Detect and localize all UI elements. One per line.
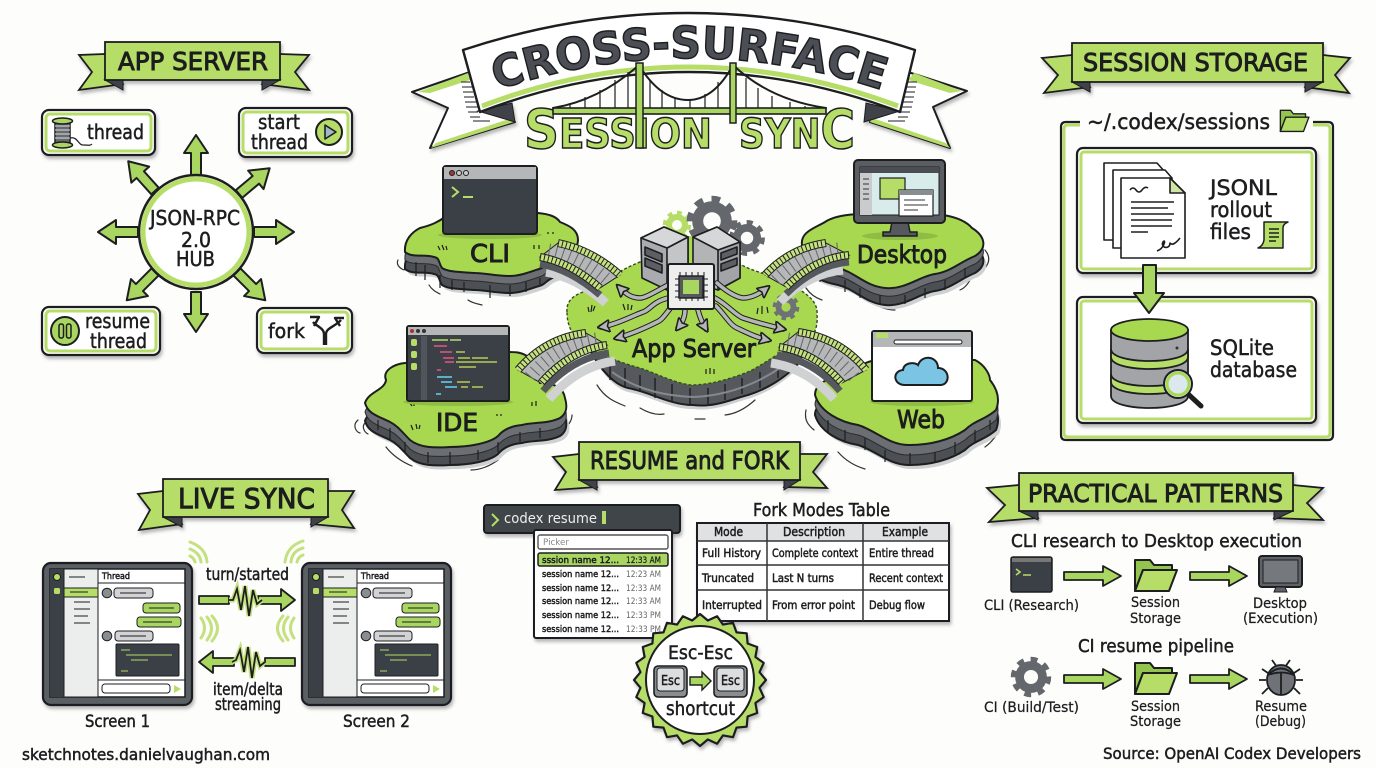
label: session storage: Storage: [1130, 714, 1181, 730]
label: session storage: [1130, 595, 1181, 627]
arrow: CI to storage: [1064, 669, 1121, 689]
icon: folder: [1280, 110, 1309, 131]
label: item/delta streaming: item/delta: [213, 680, 283, 700]
island: Desktop: [802, 160, 986, 309]
CLI rock: [405, 221, 581, 298]
icon: desktop: [1259, 556, 1302, 592]
table: fork modes: Mode: [714, 525, 743, 539]
session sync subtitle: [524, 98, 855, 161]
title text: CROSS-SURFACE: [492, 24, 889, 90]
heading banner: session storage: SESSION STORAGE: [1083, 48, 1308, 77]
label: CLI research: CLI (Research): [984, 598, 1079, 614]
title ribbon main: [463, 13, 915, 112]
label: desktop execution: [1243, 596, 1318, 627]
ground marks: [355, 250, 1000, 470]
panel: live sync: [43, 479, 451, 732]
icon: magnifier: [1164, 370, 1201, 406]
IDE window: [403, 326, 513, 406]
arrow: key to key: [690, 672, 711, 690]
Desktop rock: [802, 221, 986, 309]
bridges between islands: [518, 243, 866, 399]
badge: Esc-Esc shortcut: Esc-Esc: [668, 642, 733, 664]
island: Web: [815, 331, 1001, 469]
session picker: 12:33 PM: [626, 625, 661, 635]
terminal bar: codex resume: codex resume: [504, 511, 597, 527]
session picker: Picker: [543, 538, 570, 548]
central islands diagram: [355, 160, 1001, 470]
heading: fork modes table: Fork Modes Table: [753, 500, 890, 521]
table: fork modes: Truncated: [701, 571, 754, 585]
card: JSONL rollout files: JSONL: [1208, 176, 1277, 200]
card: start thread: thread: [251, 130, 308, 154]
table: fork modes: Last N turns: [772, 571, 834, 585]
card: JSONL rollout files: rollout: [1210, 198, 1272, 222]
session picker: 12:33 AM: [626, 597, 661, 607]
card: resume thread: resume: [85, 309, 150, 333]
CLI grass: [405, 213, 578, 276]
Web grass: [815, 360, 998, 445]
icon: thread spool: [52, 118, 92, 148]
label: desktop execution: Desktop: [1253, 596, 1307, 612]
icon: folder: [1135, 560, 1177, 591]
table: fork modes: Entire thread: [869, 546, 934, 560]
outer frame: ~/.codex/sessions: ~/.codex/sessions: [1087, 110, 1270, 134]
card: thread: thread: [87, 120, 144, 144]
arrow: files to database: [1134, 265, 1164, 313]
panel: session storage: [1042, 43, 1350, 440]
island: CLI: [405, 166, 581, 298]
outer frame: ~/.codex/sessions: [1061, 110, 1333, 440]
IDE grass: [365, 352, 566, 447]
IDE grass tufts: [410, 382, 536, 430]
pattern heading 2: CI resume pipeline: [1078, 636, 1234, 657]
badge inner disc: [646, 626, 754, 734]
title ribbon tails: [412, 72, 967, 148]
signal arcs: [190, 541, 303, 641]
card: fork: [257, 308, 352, 353]
Desktop monitor: [854, 160, 945, 240]
JSON-RPC hub: JSON-RPC: [148, 206, 240, 230]
island: App Server: App Server: [632, 334, 757, 363]
label: desktop execution: (Execution): [1243, 611, 1318, 627]
screen 1: Thread: [101, 572, 130, 582]
arrow: turn/started signal: [199, 586, 295, 616]
icon: bug: [1259, 660, 1303, 695]
screen 2: Thread: [360, 572, 389, 582]
icon: documents: [1104, 163, 1185, 258]
arrow: item/delta signal: [199, 647, 295, 678]
session picker: session name 12...: [542, 597, 619, 607]
label: session storage: Storage: [1130, 611, 1181, 627]
panel: app server: [42, 42, 352, 355]
card: JSONL rollout files: [1077, 148, 1316, 273]
label: item/delta streaming: [213, 680, 283, 715]
icon: cloud: [895, 358, 948, 385]
JSON-RPC hub: HUB: [176, 247, 215, 271]
gears: [665, 200, 797, 318]
Web rock: [815, 370, 1001, 469]
icon: folder: [1135, 663, 1177, 694]
card: SQLite database: database: [1210, 358, 1297, 382]
bridge: Web to App Server: [771, 332, 866, 399]
icon: play: [316, 119, 342, 145]
JSON-RPC hub: 2.0: [181, 228, 211, 252]
icon: CLI terminal: [1011, 557, 1052, 592]
panel: practical patterns: [984, 473, 1323, 730]
Desktop grass: [802, 213, 983, 288]
badge: Esc-Esc shortcut: shortcut: [666, 698, 735, 720]
island: Desktop: Desktop: [857, 240, 947, 269]
footer: source: Source: OpenAI Codex Developers: [1103, 744, 1361, 763]
table: fork modes: Example: [882, 525, 928, 539]
label: session storage: Session: [1131, 699, 1180, 715]
App Server grass tufts: [588, 304, 768, 374]
icon: fork arrows: [310, 317, 344, 345]
table: fork modes: Debug flow: [869, 598, 925, 612]
session picker: session name 12...: [542, 611, 619, 621]
server tower right: [693, 227, 740, 290]
panel: resume and fork: [484, 442, 949, 746]
island: IDE: [365, 326, 569, 469]
hidden arc for title baseline: [497, 58, 882, 90]
label: screen 1: Screen 1: [85, 712, 150, 732]
session picker: session name 12...: [542, 625, 619, 635]
label: session storage: [1130, 699, 1181, 730]
label: CI build/test: CI (Build/Test): [984, 700, 1079, 716]
JSON-RPC hub: [139, 175, 253, 289]
heading banner: live sync: LIVE SYNC: [178, 482, 315, 515]
screen 1: [43, 563, 192, 705]
footer: site credit: sketchnotes.danielvaughan.com: [22, 745, 270, 764]
card: start thread: [239, 108, 352, 157]
table: fork modes: Interrupted: [702, 598, 762, 612]
label: screen 2: Screen 2: [343, 712, 410, 732]
island: App Server: [567, 200, 817, 410]
green gap between towers: [688, 236, 694, 266]
label: resume debug: (Debug): [1255, 714, 1306, 730]
icon: scroll: [1258, 222, 1288, 248]
pattern heading 1: CLI research to Desktop execution: [1011, 531, 1302, 552]
card: SQLite database: SQLite: [1210, 336, 1274, 360]
island: Web: Web: [897, 405, 945, 434]
badge scalloped edge: [634, 614, 766, 746]
session sync subtitle: SESSION: [524, 98, 712, 161]
table: fork modes: From error point: [772, 598, 855, 612]
session picker: [534, 530, 672, 638]
card: thread: [42, 110, 155, 155]
arrow: CLI to storage: [1064, 566, 1121, 586]
key: Esc: Esc: [661, 674, 680, 689]
bridge: CLI to App Server: [540, 243, 620, 303]
icon: chip: [668, 264, 714, 309]
card: JSONL rollout files: files: [1210, 220, 1251, 244]
data arrows: [601, 283, 783, 340]
session picker: 12:23 AM: [626, 570, 661, 580]
label: item/delta streaming: streaming: [215, 695, 281, 715]
heading banner: practical patterns: PRACTICAL PATTERNS: [1028, 479, 1283, 508]
CLI terminal: [438, 166, 542, 239]
heading banner: resume and fork: RESUME and FORK: [590, 446, 790, 475]
card: start thread: start: [258, 110, 300, 134]
session picker: 12:33 AM: [626, 556, 661, 566]
bridge: IDE to App Server: [518, 333, 615, 399]
Web browser window: [870, 331, 974, 406]
title banner: [411, 12, 970, 161]
card: fork: fork: [268, 319, 305, 343]
table: fork modes: Full History: [702, 546, 761, 560]
card: resume thread: [42, 307, 160, 355]
session picker: sssion name 12...: [542, 556, 619, 566]
App Server rock: [575, 332, 815, 410]
session sync subtitle: SYNC: [739, 98, 855, 161]
heading banner: resume and fork: [553, 442, 827, 490]
table: fork modes: Description: [783, 525, 845, 539]
label: turn/started: turn/started: [206, 565, 289, 585]
arrow: storage to resume: [1190, 669, 1247, 689]
icon: database: [1111, 319, 1188, 408]
card: resume thread: thread: [90, 329, 147, 353]
heading banner: app server: APP SERVER: [118, 47, 268, 76]
island: IDE: IDE: [436, 408, 478, 437]
golden-gate bridge: [553, 63, 826, 148]
island: CLI: CLI: [470, 239, 510, 268]
heading banner: app server: [79, 42, 309, 90]
heading banner: practical patterns: [987, 473, 1323, 522]
label: resume debug: [1255, 699, 1307, 730]
session picker: session name 12...: [542, 570, 619, 580]
IDE rock: [365, 361, 569, 469]
label: session storage: Session: [1131, 595, 1180, 611]
heading banner: session storage: [1042, 43, 1350, 93]
icon: pause: [51, 317, 79, 345]
badge: Esc-Esc shortcut: [634, 614, 766, 746]
card: SQLite database: [1077, 297, 1316, 423]
session picker: session name 12...: [542, 584, 619, 594]
hub arrows: [98, 135, 294, 332]
icon: gear: [1014, 660, 1048, 694]
session picker: 12:33 AM: [626, 584, 661, 594]
server tower left: [641, 227, 688, 290]
key: Esc: Esc: [721, 674, 740, 689]
table: fork modes: [697, 523, 949, 621]
bridge: Desktop to App Server: [765, 243, 849, 302]
label: resume debug: Resume: [1255, 699, 1307, 715]
heading banner: live sync: [138, 479, 354, 530]
session picker: 12:33 PM: [626, 611, 661, 621]
ribbon green edge: [482, 67, 898, 106]
terminal bar: codex resume: [484, 505, 680, 533]
App Server grass: [567, 262, 817, 385]
table: fork modes: Recent context: [869, 571, 943, 585]
CLI grass tufts: [438, 232, 553, 250]
screen 2: [302, 563, 451, 705]
table: fork modes: Complete context: [772, 546, 858, 560]
arrow: storage to desktop: [1190, 566, 1247, 586]
